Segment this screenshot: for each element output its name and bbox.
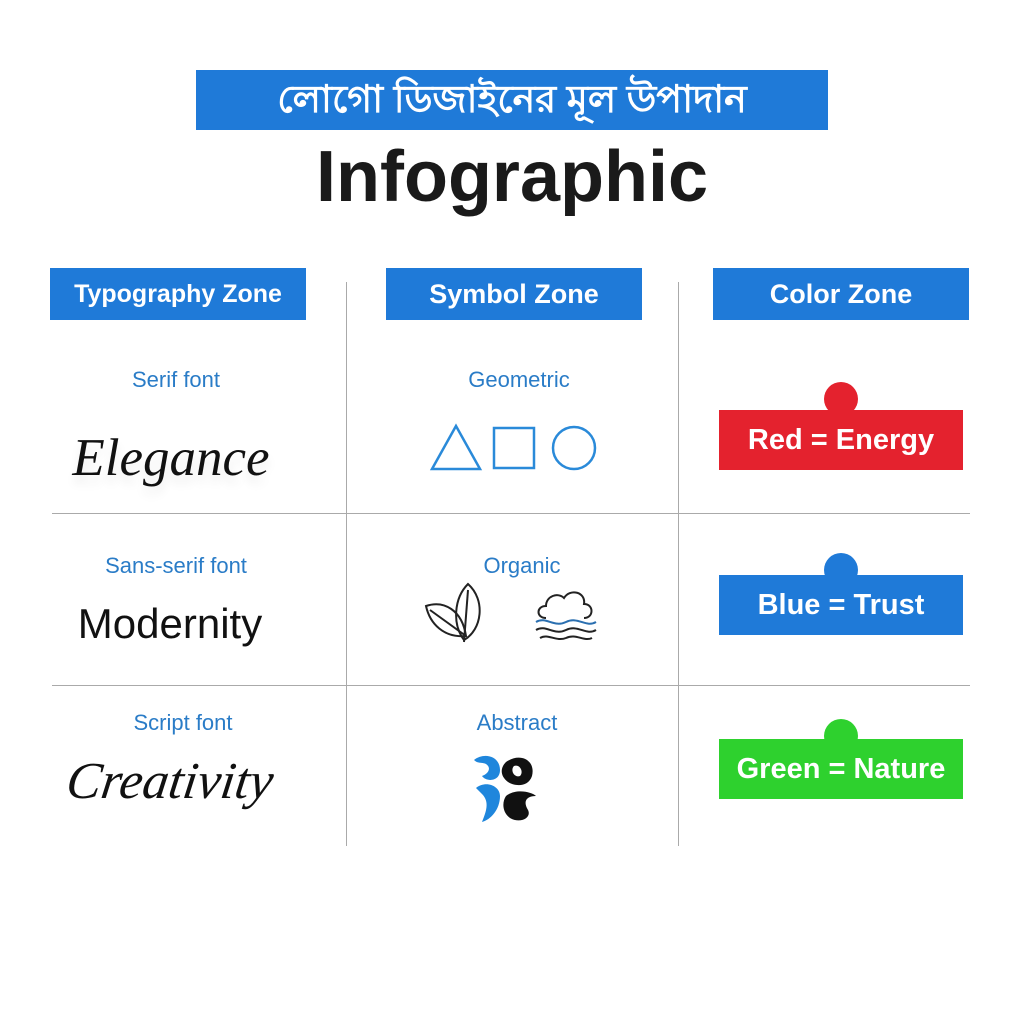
title: Infographic: Infographic	[316, 137, 708, 217]
title banner	[196, 70, 828, 130]
label: Sans-serif font: Sans-serif font	[105, 553, 247, 578]
header: Color Zone	[713, 268, 969, 320]
text: Blue = Trust	[719, 575, 963, 635]
header: Typography Zone	[50, 268, 306, 320]
red swatch	[719, 382, 963, 470]
blue swatch	[719, 553, 963, 635]
green swatch	[719, 719, 963, 799]
label: Geometric: Geometric	[468, 367, 570, 392]
sample: Creativity: Creativity	[63, 753, 277, 810]
icon: geometric shapes	[430, 424, 596, 470]
icon: cloud waves	[536, 591, 596, 640]
label: Script font: Script font	[133, 710, 233, 735]
icon: leaves	[424, 582, 481, 642]
text: Green = Nature	[719, 739, 963, 799]
header: Typography Zone: Typography Zone	[74, 280, 282, 308]
label: Abstract: Abstract	[477, 710, 557, 735]
dot: red	[824, 382, 858, 416]
text: Blue = Trust: Blue = Trust	[758, 589, 924, 621]
text: Red = Energy	[719, 410, 963, 470]
sample: Elegance: Elegance	[72, 429, 270, 487]
sample: Modernity: Modernity	[78, 600, 262, 647]
header: Symbol Zone	[386, 268, 642, 320]
dot: blue	[824, 553, 858, 587]
text: Green = Nature: Green = Nature	[737, 753, 945, 785]
header: Symbol Zone: Symbol Zone	[429, 279, 599, 309]
text: Red = Energy: Red = Energy	[748, 424, 934, 456]
icon: abstract mark	[474, 756, 536, 822]
dot: green	[824, 719, 858, 753]
header: Color Zone: Color Zone	[770, 279, 912, 309]
label: Organic: Organic	[483, 553, 561, 578]
label: Serif font: Serif font	[132, 367, 220, 392]
title banner: লোগো ডিজাইনের মূল উপাদান	[277, 79, 747, 121]
